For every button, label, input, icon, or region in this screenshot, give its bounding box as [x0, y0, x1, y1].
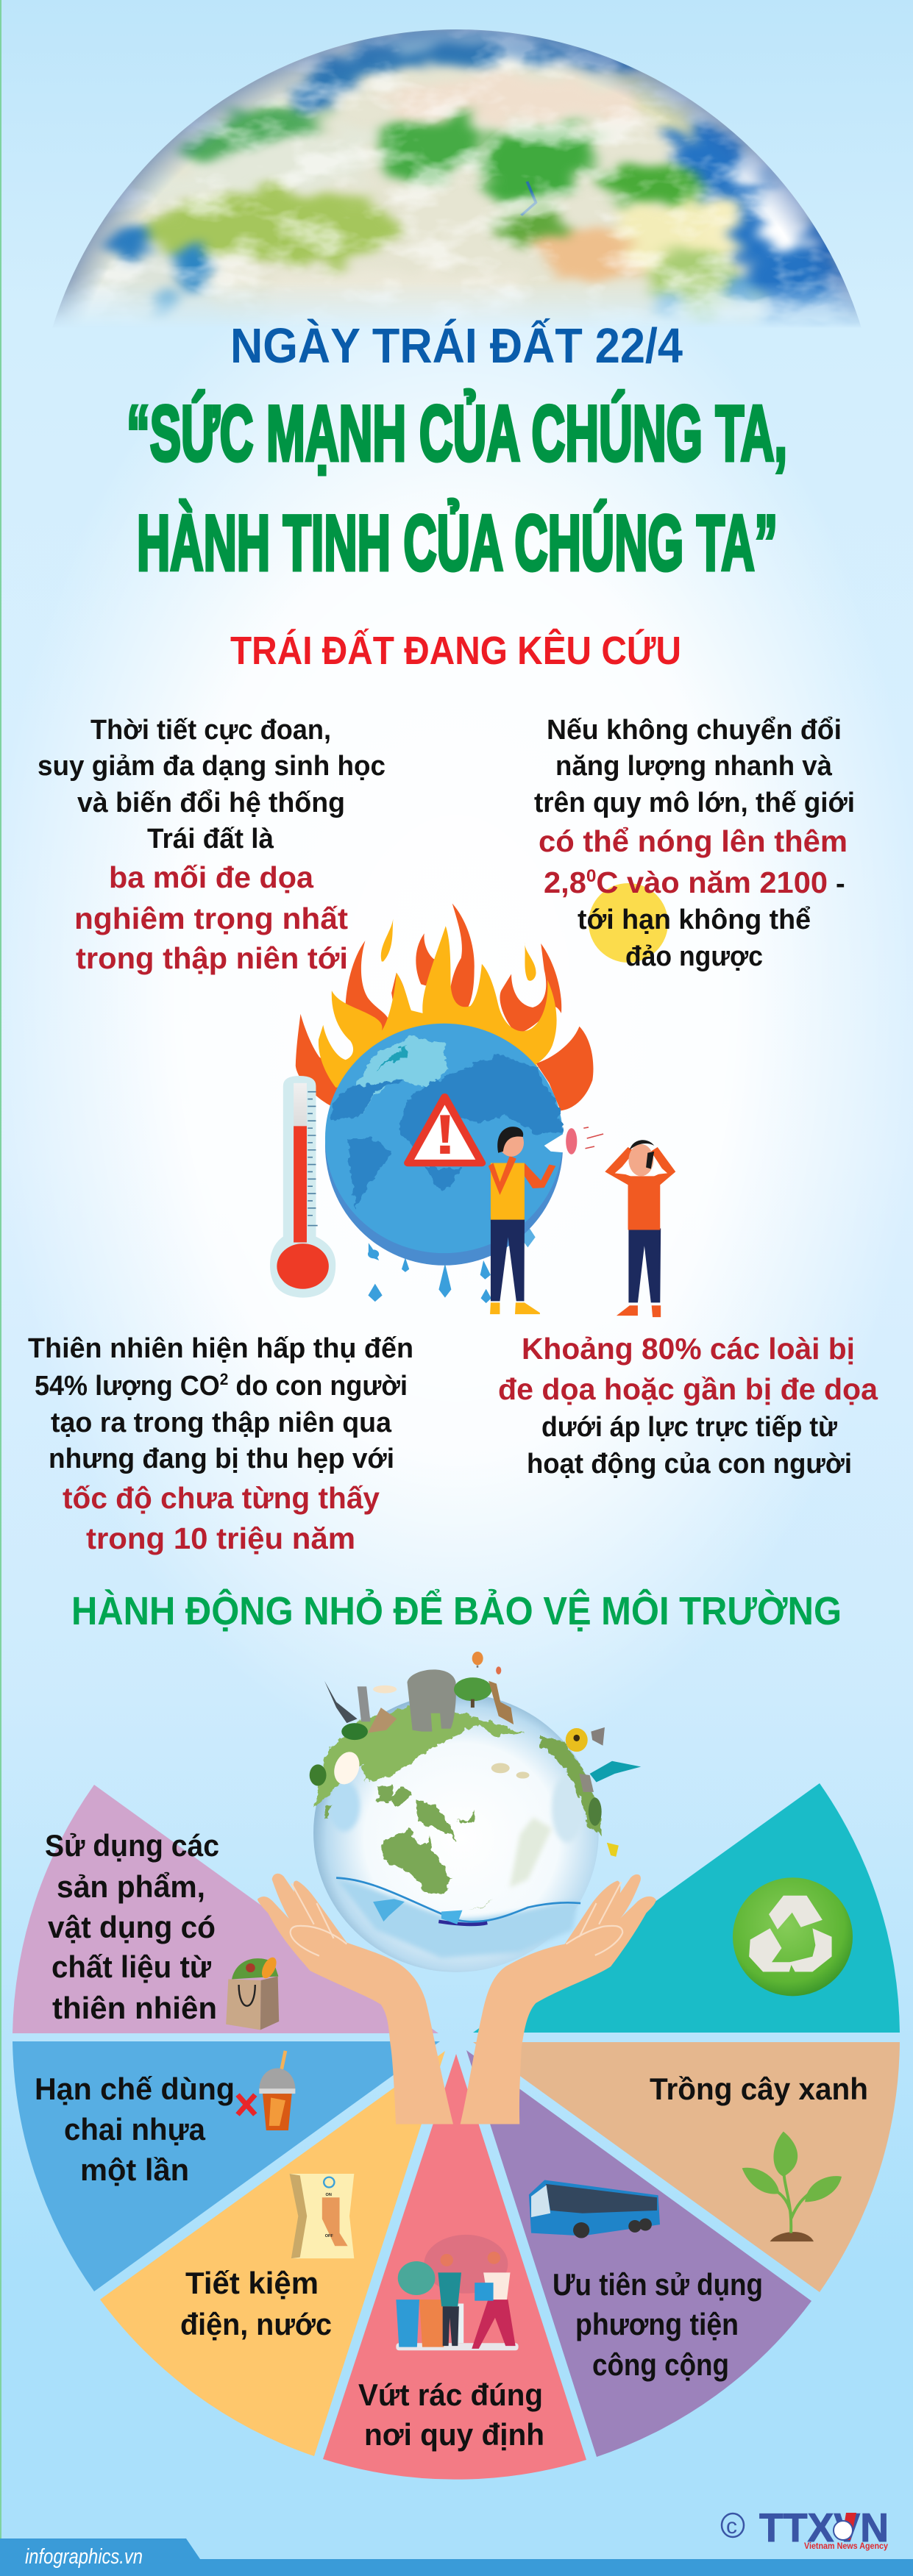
label: natural materials: vật dụng có: [48, 1910, 216, 1944]
label: proper litter disposal: nơi quy định: [364, 2417, 544, 2452]
icons in zoom coordinates: [226, 1877, 853, 2350]
title: [127, 318, 787, 587]
label: single-use plastic: [35, 2072, 235, 2187]
label: save power and water: Tiết kiệm: [185, 2266, 319, 2300]
label: save power and water: điện, nước: [180, 2307, 332, 2341]
text block: three threats: và biến đổi hệ thống: [77, 788, 345, 818]
text block: warming 2.8C: -: [836, 868, 845, 899]
icon: flames: [296, 903, 593, 1110]
label: single-use plastic: chai nhựa: [64, 2112, 206, 2147]
icon: thermometer: [270, 1076, 335, 1298]
text block: nature absorbs CO2: tạo ra trong thập niên qua: [51, 1407, 392, 1438]
slice: plastic bottles: [13, 2041, 440, 2291]
wordmark: TTXVN: [759, 2505, 889, 2550]
slice: plant trees: [473, 2042, 900, 2292]
logo red V accent and globe: [834, 2513, 856, 2540]
heading: small actions: HÀNH ĐỘNG NHỎ ĐỂ BẢO VỆ MÔI TRƯỜNG: [71, 1588, 842, 1633]
text block: warming 2.8C: đảo ngược: [625, 941, 763, 972]
text block: nature absorbs CO2: 2: [220, 1370, 228, 1388]
icon: recycling bins and people: [396, 2235, 519, 2350]
label: natural materials: sản phẩm,: [57, 1869, 205, 1904]
label: single-use plastic: một lần: [80, 2152, 189, 2187]
text block: three threats: suy giảm đa dạng sinh học: [38, 751, 386, 782]
text block: warming 2.8C: trên quy mô lớn, thế giới: [534, 788, 855, 818]
text block: warming 2.8C: năng lượng nhanh và: [555, 751, 833, 782]
text block: three threats: ba mối đe dọa: [109, 860, 314, 894]
icon: light switch: ON: [326, 2193, 332, 2197]
text block: nature absorbs CO2: nhưng đang bị thu hẹp với: [49, 1444, 394, 1474]
text block: warming 2.8C: 2,8: [544, 866, 586, 899]
text block: warming 2.8C: có thể nóng lên thêm: [539, 824, 848, 858]
slice: litter: [323, 2054, 586, 2480]
copyright mark: [722, 2513, 744, 2538]
illustration: globe with nature: [310, 1652, 641, 1972]
slice: recycling: [473, 1783, 900, 2033]
icon: right hand: [461, 1874, 656, 2124]
label: natural materials: Sử dụng các: [45, 1828, 219, 1863]
icon: balloons: [472, 1652, 501, 1674]
person holding head: [605, 1140, 675, 1317]
slice: natural materials: [13, 1785, 438, 2033]
label: plant trees: Trồng cây xanh: [650, 2072, 868, 2106]
copyright mark: c: [726, 2514, 737, 2538]
text block: warming 2.8C: Nếu không chuyển đổi: [547, 715, 842, 746]
text block: 80 percent of species: [498, 1332, 878, 1480]
elephant, tree and giraffe: [310, 1669, 514, 1788]
text block: nature absorbs CO2: do con người: [228, 1371, 408, 1402]
illustration: two hands: [257, 1874, 656, 2124]
sunflowers, butterfly and teal splash: [566, 1727, 641, 1857]
person with megaphone: [489, 1127, 603, 1314]
icon: seedling: [742, 2131, 842, 2241]
label: natural materials: thiên nhiên: [52, 1991, 217, 2025]
decorative sun: [589, 883, 668, 963]
text block: 80 percent of species: Khoảng 80% các loài bị: [522, 1332, 855, 1366]
icon: melting blue globe: [325, 1024, 563, 1303]
text block: nature absorbs CO2: trong 10 triệu năm: [86, 1521, 355, 1555]
label: public transport: phương tiện: [575, 2307, 739, 2341]
text block: nature absorbs CO2: tốc độ chưa từng thấy: [63, 1481, 380, 1515]
icon: light switch: [289, 2174, 354, 2258]
text block: 80 percent of species: hoạt động của con người: [527, 1449, 852, 1480]
label: proper litter disposal: [358, 2377, 544, 2452]
icon: warning triangle: [408, 1097, 482, 1163]
illustration: burning melting earth with thermometer and people: [270, 903, 675, 1317]
logo: TTXVN: [722, 2505, 889, 2551]
logo tagline: Vietnam News Agency: [804, 2541, 888, 2551]
photo: earth dome: [54, 29, 861, 327]
text block: three threats: Thời tiết cực đoan,: [90, 715, 331, 746]
label: public transport: công cộng: [592, 2347, 729, 2382]
label: public transport: [553, 2267, 763, 2382]
label: proper litter disposal: Vứt rác đúng: [358, 2377, 543, 2412]
eiffel tower and leaning tower: [324, 1681, 397, 1733]
text block: three threats: nghiêm trọng nhất: [74, 902, 348, 935]
text block: 80 percent of species: dưới áp lực trực tiếp từ: [541, 1412, 837, 1443]
text block: three threats: trong thập niên tới: [76, 941, 348, 975]
label: natural materials: chất liệu từ: [51, 1949, 212, 1984]
icon: recycling badge: [733, 1877, 853, 1996]
label: single-use plastic: Hạn chế dùng: [35, 2072, 235, 2106]
glass earth: [313, 1694, 602, 1972]
footer bar: [0, 2538, 913, 2576]
text block: 80 percent of species: đe dọa hoặc gần bị đe dọa: [498, 1372, 878, 1406]
text block: nature absorbs CO2: 54% lượng CO: [35, 1371, 230, 1402]
text block: warming 2.8C: [534, 715, 855, 972]
label: public transport: Ưu tiên sử dụng: [553, 2267, 763, 2302]
heading: earth is crying for help: TRÁI ĐẤT ĐANG KÊU CỨU: [230, 628, 681, 673]
text block: warming 2.8C: 0: [586, 866, 596, 886]
text block: warming 2.8C: C vào năm 2100: [596, 866, 828, 899]
slice: save power and water: [100, 2051, 445, 2456]
pie chart: seven actions: [13, 1783, 900, 2480]
text block: nature absorbs CO2: Thiên nhiên hiện hấp thụ đến: [28, 1333, 413, 1364]
text block: three threats: [38, 715, 386, 975]
icon: left hand: [257, 1874, 453, 2124]
text block: three threats: Trái đất là: [147, 824, 274, 854]
slice: public transport: [466, 2050, 811, 2457]
label: save power and water: [180, 2266, 332, 2341]
icon: light switch: OFF: [325, 2234, 333, 2238]
source credit: infographics.vn: [25, 2545, 143, 2569]
text block: warming 2.8C: tới hạn không thể: [578, 905, 811, 935]
title line 1: NGÀY TRÁI ĐẤT 22/4: [230, 318, 683, 374]
label: natural materials: [45, 1828, 219, 2025]
icon: plastic cup: [238, 2051, 295, 2130]
slice labels and icons: [35, 1828, 868, 2452]
icon: shopping bag: [226, 1955, 280, 2030]
text block: nature absorbs CO2: [28, 1333, 413, 1555]
icon: blue bus: [529, 2180, 660, 2238]
